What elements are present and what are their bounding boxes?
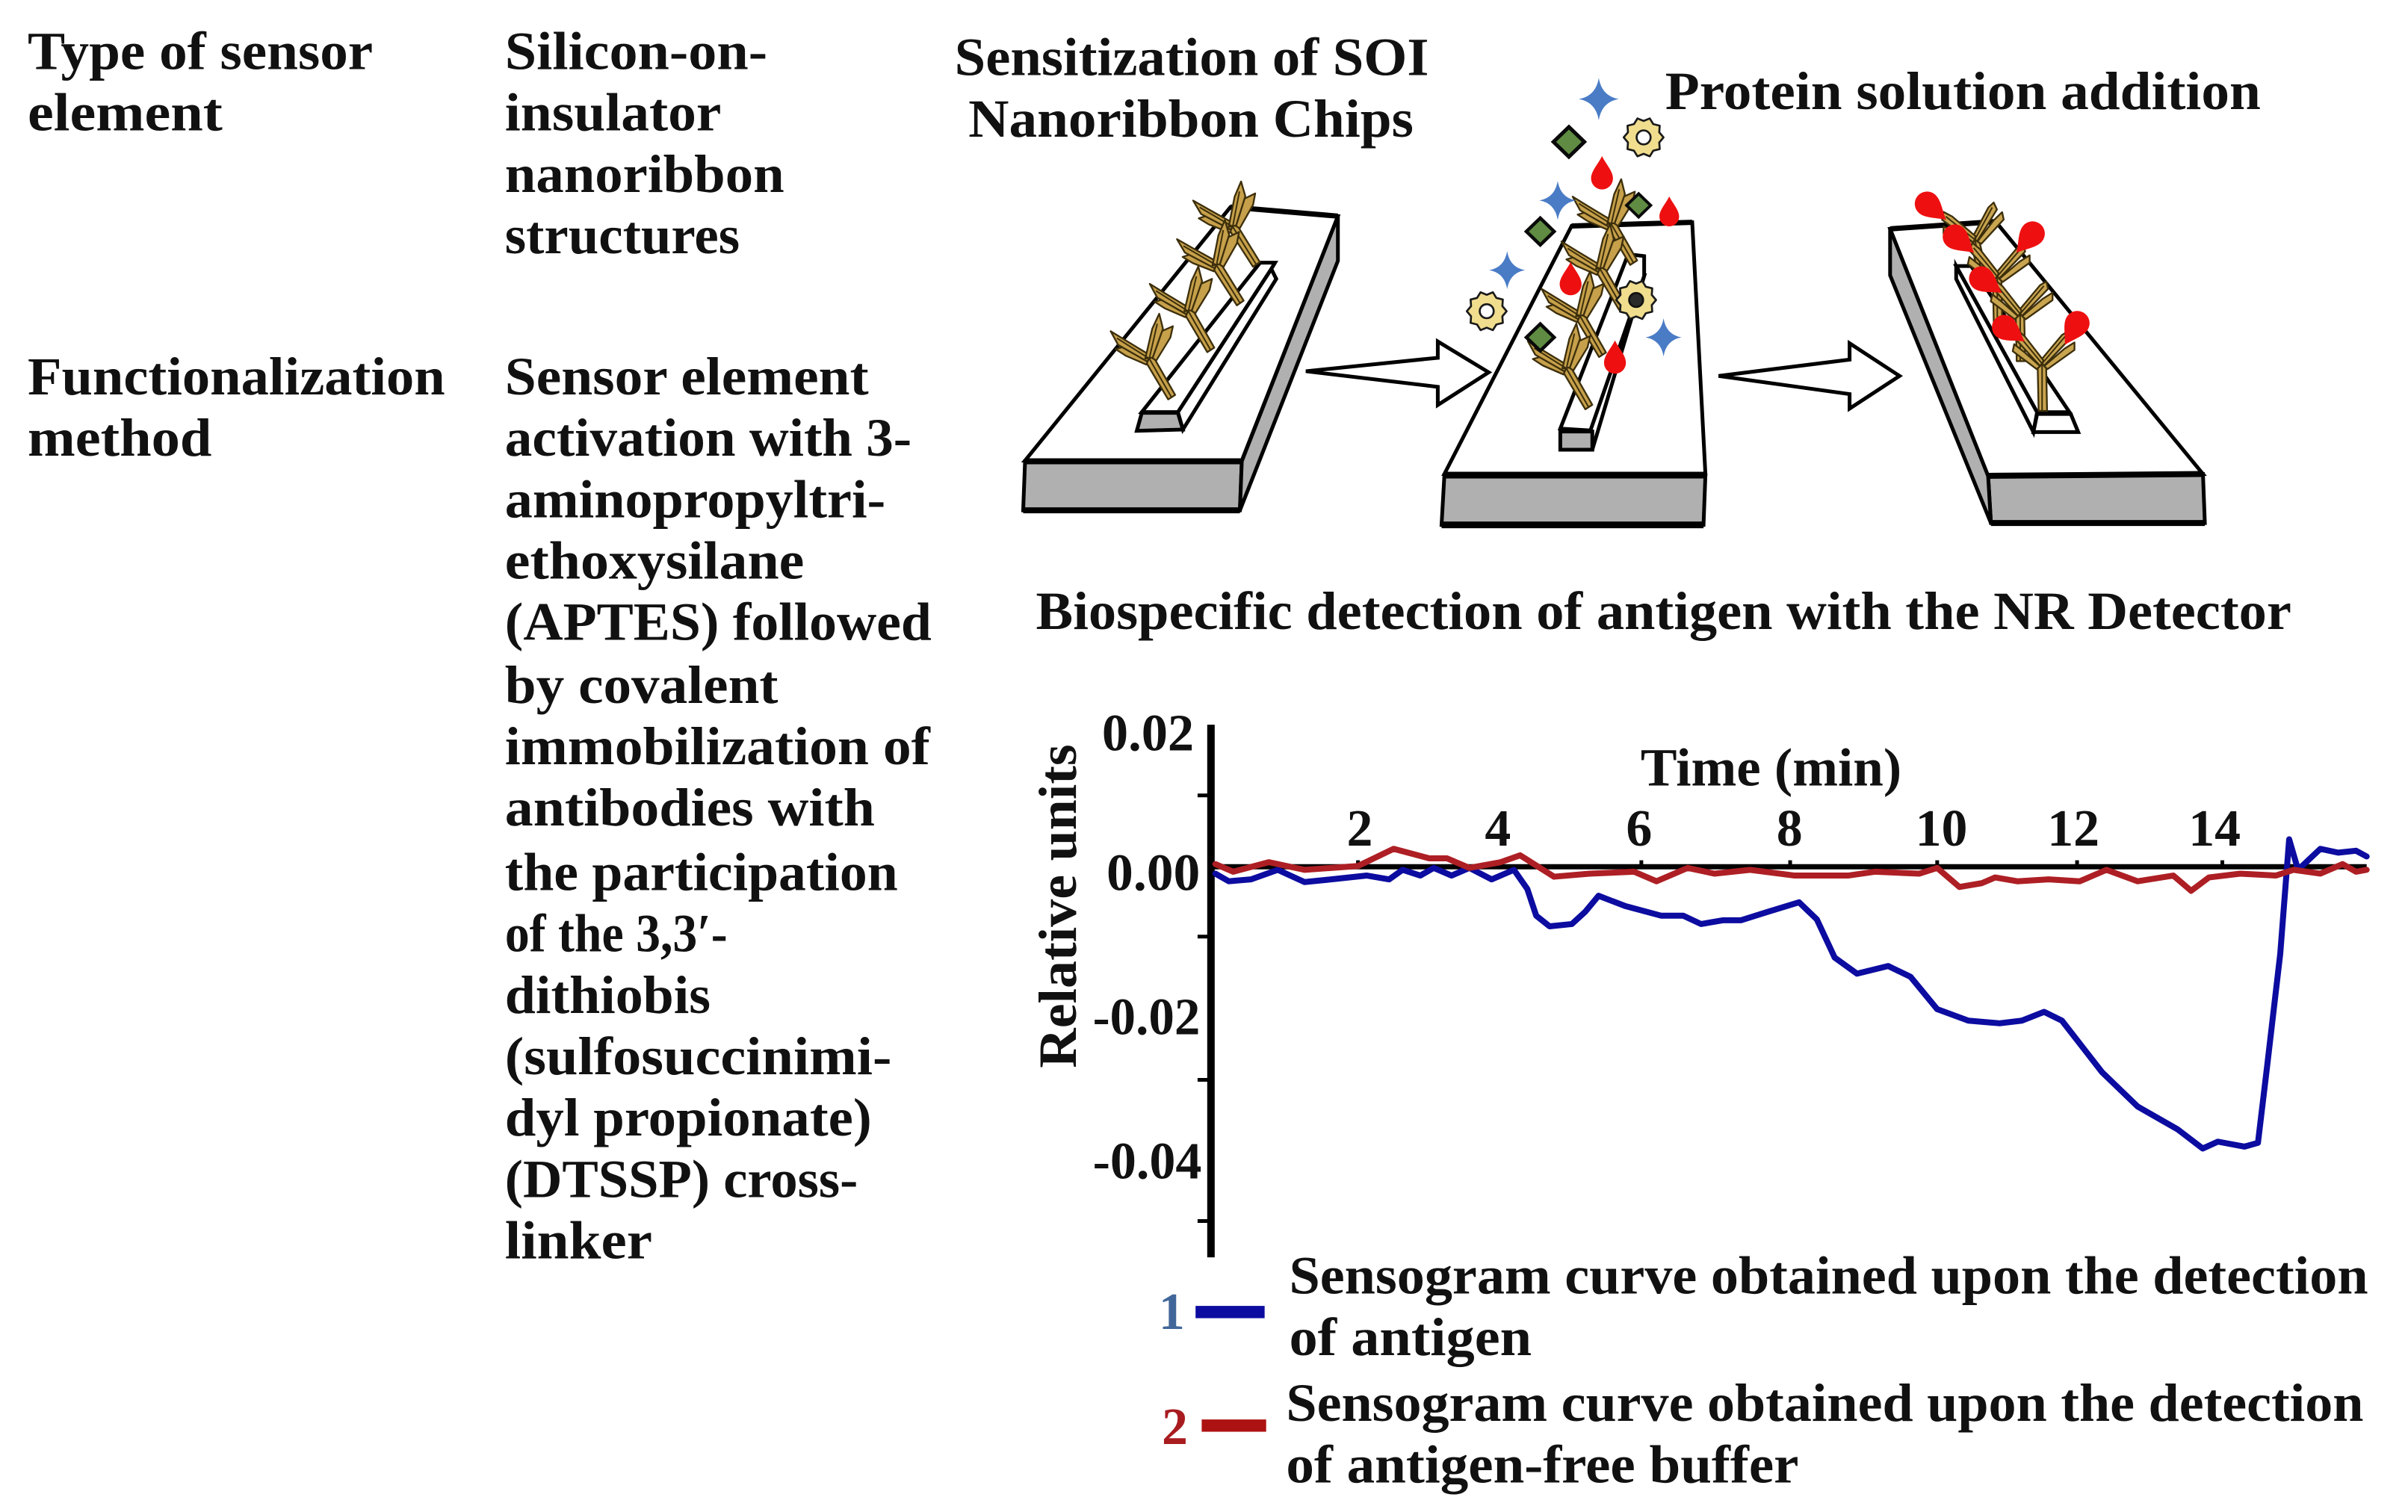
arrow: chip 1 to chip 2 — [1306, 341, 1489, 405]
value: functionalization description: (sulfosuccinimi- — [505, 1026, 891, 1086]
chip 3: antigen bound to antibodies — [1890, 187, 2205, 523]
x axis tick labels: 8 — [1777, 800, 1803, 858]
value: functionalization description: dithiobis — [505, 965, 711, 1025]
legend item 1: Sensogram curve obtained upon the detection — [1290, 1246, 2368, 1306]
legend item 1 — [1159, 1246, 2368, 1367]
antibodies and protein molecules — [1467, 78, 1682, 409]
x axis tick labels: 2 — [1347, 800, 1372, 858]
heading: sensitization of SOI nanoribbon chips: Sensitization of SOI — [955, 28, 1429, 87]
y axis title: Relative units — [1028, 744, 1088, 1068]
value: functionalization description: immobilization of — [505, 716, 931, 776]
y axis tick labels: 0.02 — [1102, 705, 1194, 763]
axes — [1198, 725, 2367, 1257]
y axis tick labels — [1093, 705, 1201, 1191]
legend — [1159, 1246, 2368, 1494]
value: functionalization description: ethoxysilane — [505, 530, 804, 590]
x axis tick labels: 12 — [2047, 800, 2099, 858]
value: functionalization description: linker — [505, 1210, 652, 1270]
row: functionalization method — [28, 347, 932, 1270]
value: functionalization description: (DTSSP) cross- — [505, 1149, 858, 1209]
y axis tick labels: -0.02 — [1093, 989, 1200, 1047]
legend item 2 — [1162, 1373, 2363, 1494]
value: functionalization description: antibodies with — [505, 778, 875, 837]
y axis tick labels: -0.04 — [1093, 1133, 1201, 1191]
chip 2: protein solution applied — [1441, 78, 1706, 525]
value: functionalization description: dyl propionate) — [505, 1088, 872, 1147]
x axis tick labels: 4 — [1485, 800, 1511, 858]
heading: sensitization of SOI nanoribbon chips: Nanoribbon Chips — [968, 89, 1414, 149]
value: functionalization description: activation with 3- — [505, 408, 911, 468]
legend item 1: 1 — [1159, 1283, 1185, 1341]
arrow: chip 2 to chip 3 — [1718, 343, 1899, 409]
label: type of sensor element: Type of sensor — [28, 21, 373, 81]
value: functionalization description: of the 3,3′- — [505, 904, 728, 964]
x axis tick labels: 10 — [1916, 800, 1967, 858]
label: functionalization method: method — [28, 408, 212, 468]
value: silicon-on-insulator nanoribbon structures: nanoribbon — [505, 144, 784, 204]
x axis tick labels: 14 — [2188, 800, 2241, 858]
value: silicon-on-insulator nanoribbon structures — [505, 21, 784, 265]
x axis title: Time (min) — [1641, 738, 1901, 798]
value: functionalization description — [505, 347, 932, 1270]
curve 1: antigen detection — [1216, 839, 2367, 1148]
legend item 2: of antigen-free buffer — [1286, 1434, 1798, 1494]
sensogram chart — [1028, 705, 2367, 1257]
y axis tick labels: 0.00 — [1106, 844, 1200, 902]
value: functionalization description: by covalent — [505, 655, 779, 715]
x axis tick labels — [1347, 800, 2241, 858]
label: functionalization method: Functionalization — [28, 347, 445, 406]
value: functionalization description: the participation — [505, 842, 898, 902]
value: functionalization description: (APTES) followed — [505, 592, 932, 652]
value: functionalization description: aminopropyltri- — [505, 469, 885, 529]
label: type of sensor element: element — [28, 83, 223, 143]
row: type of sensor element — [28, 21, 784, 265]
legend item 1: of antigen — [1290, 1307, 1532, 1367]
label: type of sensor element — [28, 21, 373, 143]
heading: sensitization of SOI nanoribbon chips — [955, 28, 1429, 149]
chip 1: sensitized chip with antibodies — [1023, 181, 1338, 510]
legend item 2: 2 — [1162, 1398, 1188, 1456]
value: silicon-on-insulator nanoribbon structures: structures — [505, 205, 740, 265]
label: functionalization method — [28, 347, 445, 468]
legend item 2: Sensogram curve obtained upon the detection — [1286, 1373, 2363, 1433]
value: silicon-on-insulator nanoribbon structures: Silicon-on- — [505, 21, 767, 81]
heading: protein solution addition: Protein solution addition — [1665, 61, 2261, 121]
value: functionalization description: Sensor element — [505, 347, 869, 406]
value: silicon-on-insulator nanoribbon structures: insulator — [505, 83, 721, 143]
curve 2: antigen-free buffer — [1216, 849, 2367, 890]
x axis tick labels: 6 — [1626, 800, 1652, 858]
heading: biospecific detection: Biospecific detection of antigen with the NR Detector — [1036, 581, 2291, 641]
